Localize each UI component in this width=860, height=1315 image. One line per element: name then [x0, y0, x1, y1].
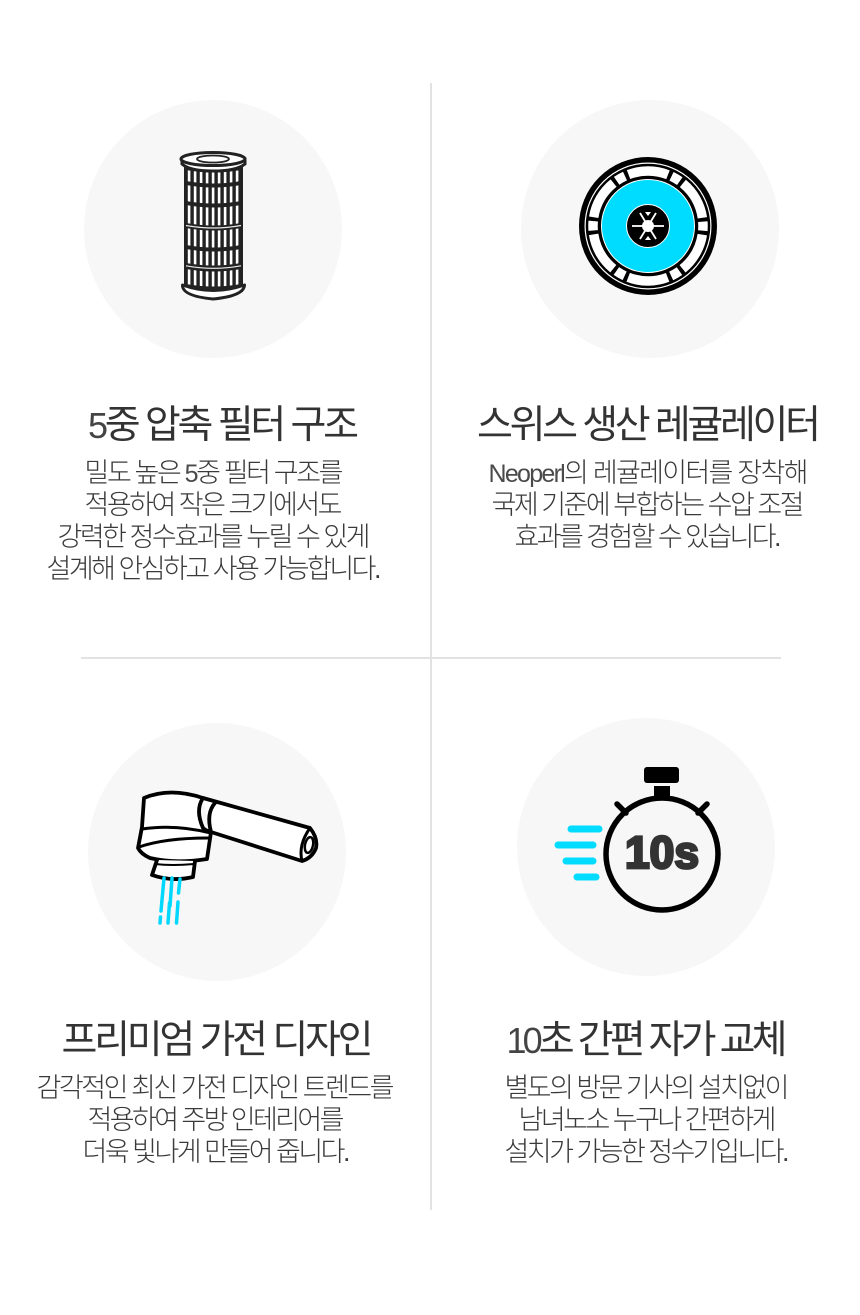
panel: 10-second replacement — [504, 718, 790, 1167]
text block: design: 감각적인 최신 가전 디자인 트렌드를 — [36, 1073, 394, 1103]
text block: filter: 설계해 안심하고 사용 가능합니다. — [46, 554, 382, 584]
text block: regulator — [488, 458, 808, 552]
icon: faucet head — [138, 792, 316, 879]
text block: regulator: 효과를 경험할 수 있습니다. — [514, 522, 782, 552]
icon background circle: filter — [84, 100, 342, 358]
text block: regulator: Neoperl의 레귤레이터를 장착해 — [488, 458, 808, 488]
icon: stopwatch — [606, 767, 718, 910]
text block: design — [36, 1073, 394, 1167]
icon background circle: faucet — [88, 723, 346, 981]
panel: 5-layer filter — [46, 100, 382, 584]
heading: replacement: 10초 간편 자가 교체 — [506, 1019, 788, 1062]
text block: replacement: 남녀노소 누구나 간편하게 — [518, 1105, 776, 1135]
icon background circle: regulator — [521, 100, 779, 358]
icon: regulator — [579, 157, 717, 295]
icon: filter cartridge — [181, 152, 245, 299]
text block: filter: 밀도 높은 5중 필터 구조를 — [84, 458, 344, 488]
water stream — [160, 878, 180, 923]
speed lines — [558, 829, 599, 877]
heading: design: 프리미엄 가전 디자인 — [62, 1019, 374, 1062]
text block: regulator: 국제 기준에 부합하는 수압 조절 — [492, 490, 804, 520]
panel: premium design — [36, 723, 394, 1167]
heading: filter: 5중 압축 필터 구조 — [88, 404, 359, 447]
text block: replacement — [504, 1073, 790, 1167]
text block: filter: 강력한 정수효과를 누릴 수 있게 — [58, 522, 370, 552]
text block: replacement: 설치가 가능한 정수기입니다. — [504, 1137, 790, 1167]
icon background circle: stopwatch — [517, 718, 775, 976]
text block: filter — [46, 458, 382, 584]
text block: design: 적용하여 주방 인테리어를 — [88, 1105, 344, 1135]
icon: stopwatch: 10s — [625, 827, 699, 878]
text block: replacement: 별도의 방문 기사의 설치없이 — [504, 1073, 790, 1103]
heading: regulator: 스위스 생산 레귤레이터 — [477, 404, 821, 447]
panel: Swiss regulator — [477, 100, 821, 552]
text block: filter: 적용하여 작은 크기에서도 — [84, 490, 342, 520]
text block: design: 더욱 빛나게 만들어 줍니다. — [82, 1137, 350, 1167]
